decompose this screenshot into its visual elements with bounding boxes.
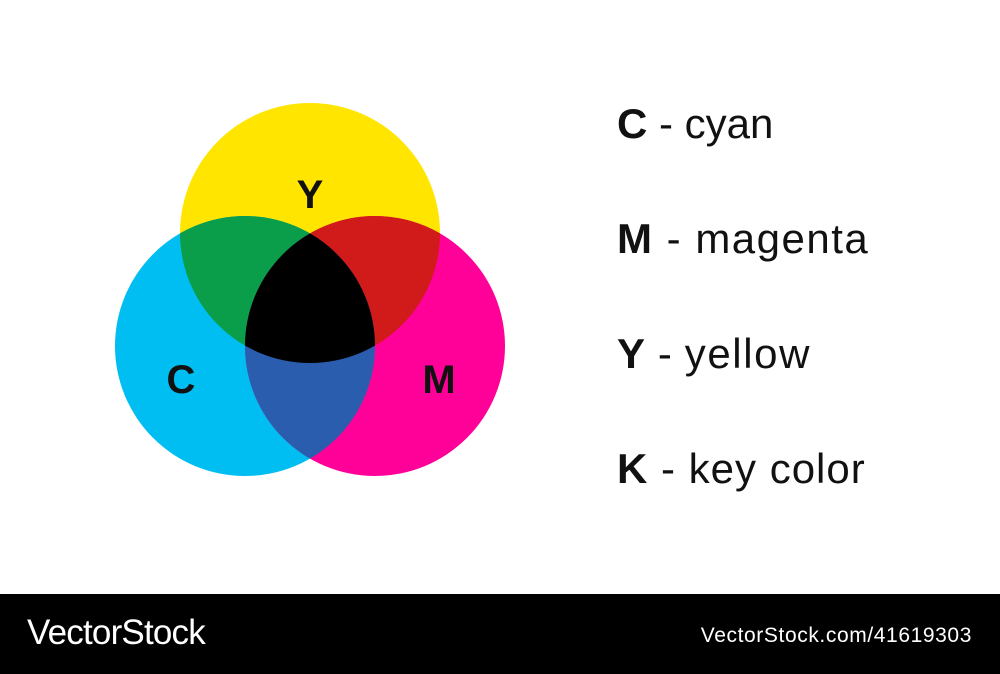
label Y: Y (297, 173, 324, 217)
overlap: green (180, 216, 310, 346)
footer bar (0, 594, 1000, 674)
circle: cyan (115, 216, 375, 476)
overlap: blue (245, 234, 375, 458)
legend: yellow: Y - yellow (617, 330, 811, 377)
footer logo: VectorStock (27, 613, 205, 652)
venn diagram (115, 103, 505, 476)
overlap: black (245, 234, 375, 363)
circle: yellow (180, 103, 440, 363)
label M: M (422, 358, 456, 402)
label C: C (167, 358, 195, 402)
legend: magenta: M - magenta (617, 215, 869, 262)
legend: key color: K - key color (617, 445, 866, 492)
legend: cyan: C - cyan (617, 100, 773, 147)
circle: magenta (245, 216, 505, 476)
overlap: red (245, 216, 440, 346)
footer id: VectorStock.com/41619303 (701, 624, 972, 647)
